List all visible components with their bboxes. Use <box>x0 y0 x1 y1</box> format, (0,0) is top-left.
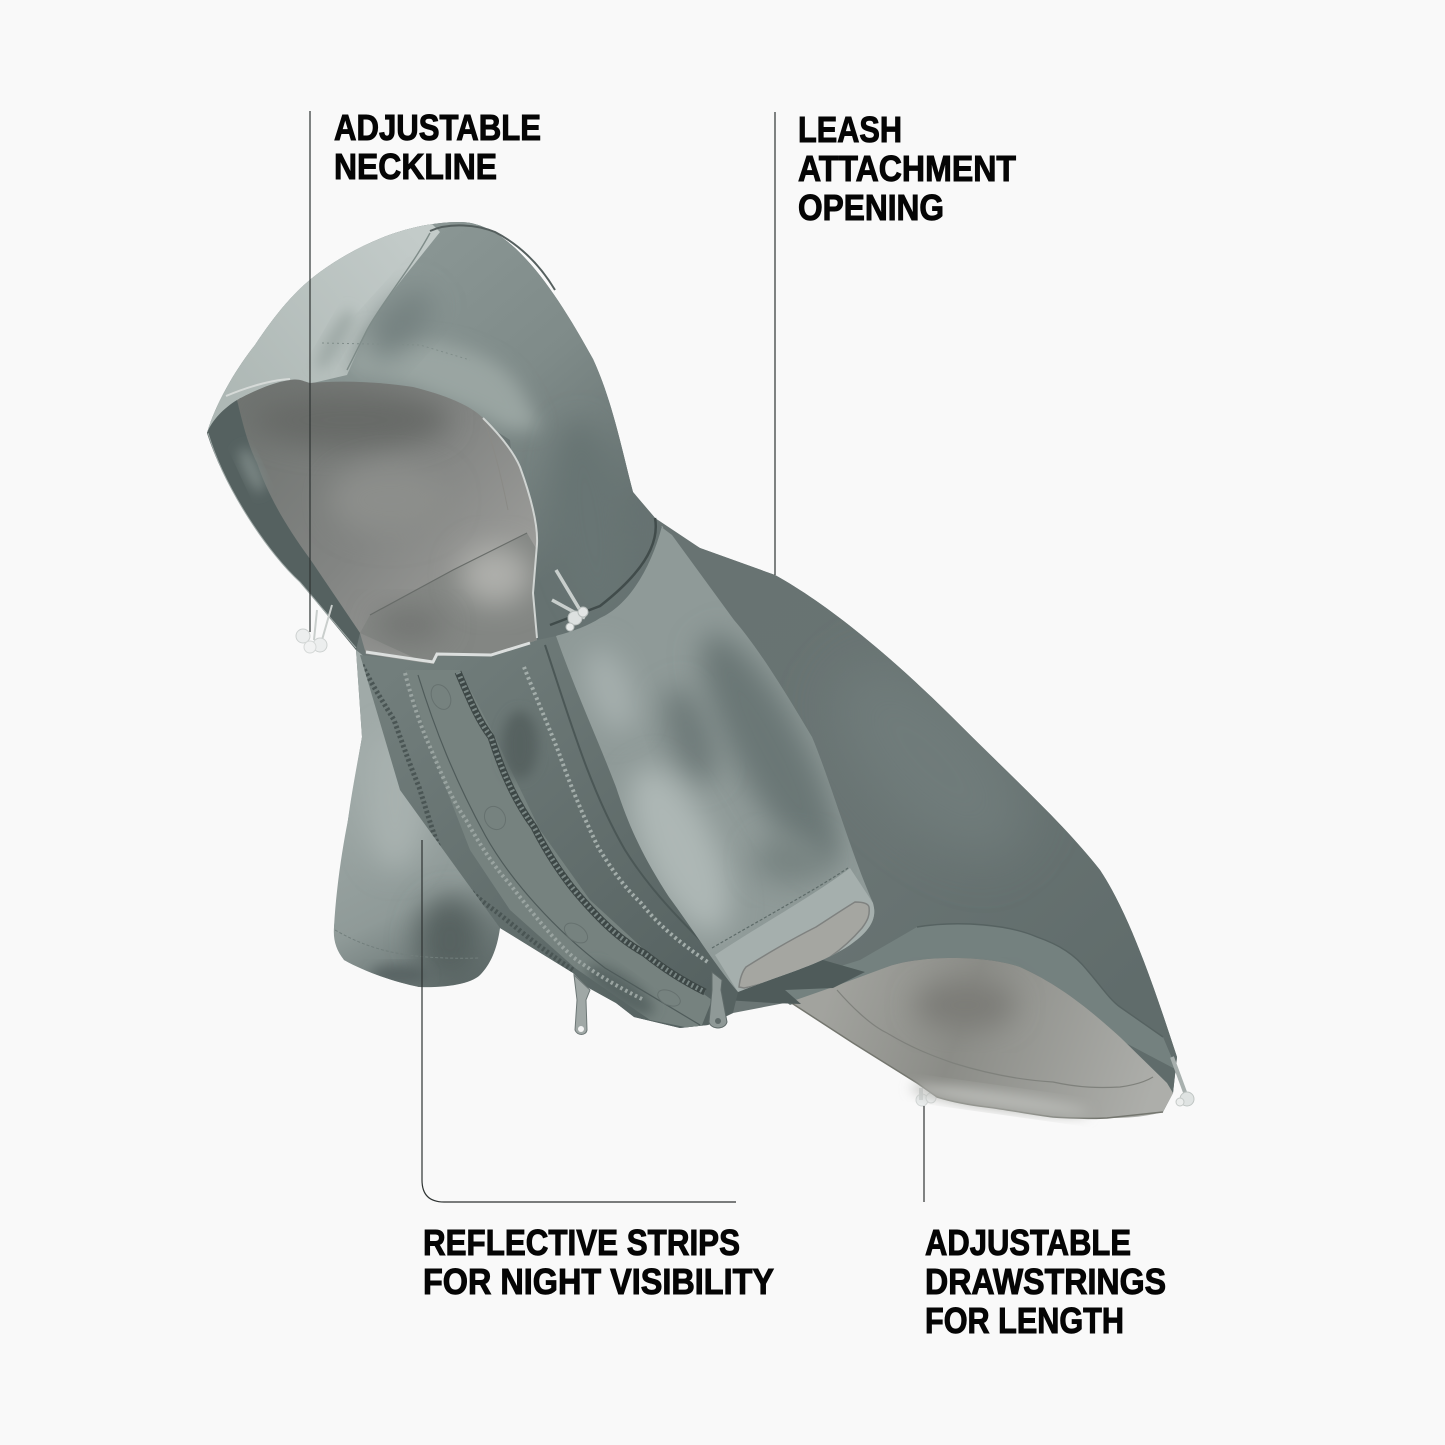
back cape panel <box>656 518 1177 1092</box>
leader line: adjustable drawstrings <box>923 1106 925 1202</box>
infographic canvas <box>207 111 1194 1334</box>
neck cord and toggle <box>550 518 656 631</box>
zipper pulls <box>574 972 727 1034</box>
label: adjustable neckline: NECKLINE <box>334 146 497 187</box>
label: reflective strips: FOR NIGHT VISIBILITY <box>423 1261 774 1302</box>
hem drawstring toggle left <box>916 1088 936 1106</box>
cape lining <box>790 958 1173 1121</box>
drawstring toggle at hem <box>1172 1057 1194 1106</box>
label: adjustable drawstrings: ADJUSTABLE <box>925 1222 1131 1263</box>
chest panels and zippers <box>360 644 737 1028</box>
hood rim band <box>207 400 360 650</box>
leader line: reflective strips <box>422 840 736 1202</box>
dark strap under sleeve <box>725 960 865 1004</box>
rear leg sleeve <box>334 650 500 988</box>
leader line: adjustable neckline <box>309 111 311 632</box>
leader line: leash attachment opening <box>774 112 776 575</box>
sleeve cuff lining <box>739 902 869 988</box>
label: leash attachment opening: ATTACHMENT <box>798 148 1016 189</box>
sleeve <box>556 528 874 992</box>
illustration: dog raincoat <box>200 215 1200 1121</box>
label: leash attachment opening <box>798 109 1016 228</box>
label: adjustable neckline: ADJUSTABLE <box>334 107 541 148</box>
chest placket <box>425 690 710 1028</box>
left neck toggle <box>296 605 332 653</box>
label: adjustable neckline <box>334 107 541 187</box>
label: reflective strips <box>423 1222 774 1302</box>
hood inner lining <box>207 375 550 675</box>
coat silhouette base <box>207 222 1177 1118</box>
label: adjustable drawstrings: FOR LENGTH <box>925 1300 1124 1341</box>
snap buttons <box>427 681 683 1009</box>
label: reflective strips: REFLECTIVE STRIPS <box>423 1222 740 1263</box>
hood outer <box>200 215 670 645</box>
label: adjustable drawstrings: DRAWSTRINGS <box>925 1261 1166 1302</box>
label: leash attachment opening: OPENING <box>798 187 944 228</box>
label: adjustable drawstrings <box>925 1222 1166 1341</box>
label: leash attachment opening: LEASH <box>798 109 902 150</box>
